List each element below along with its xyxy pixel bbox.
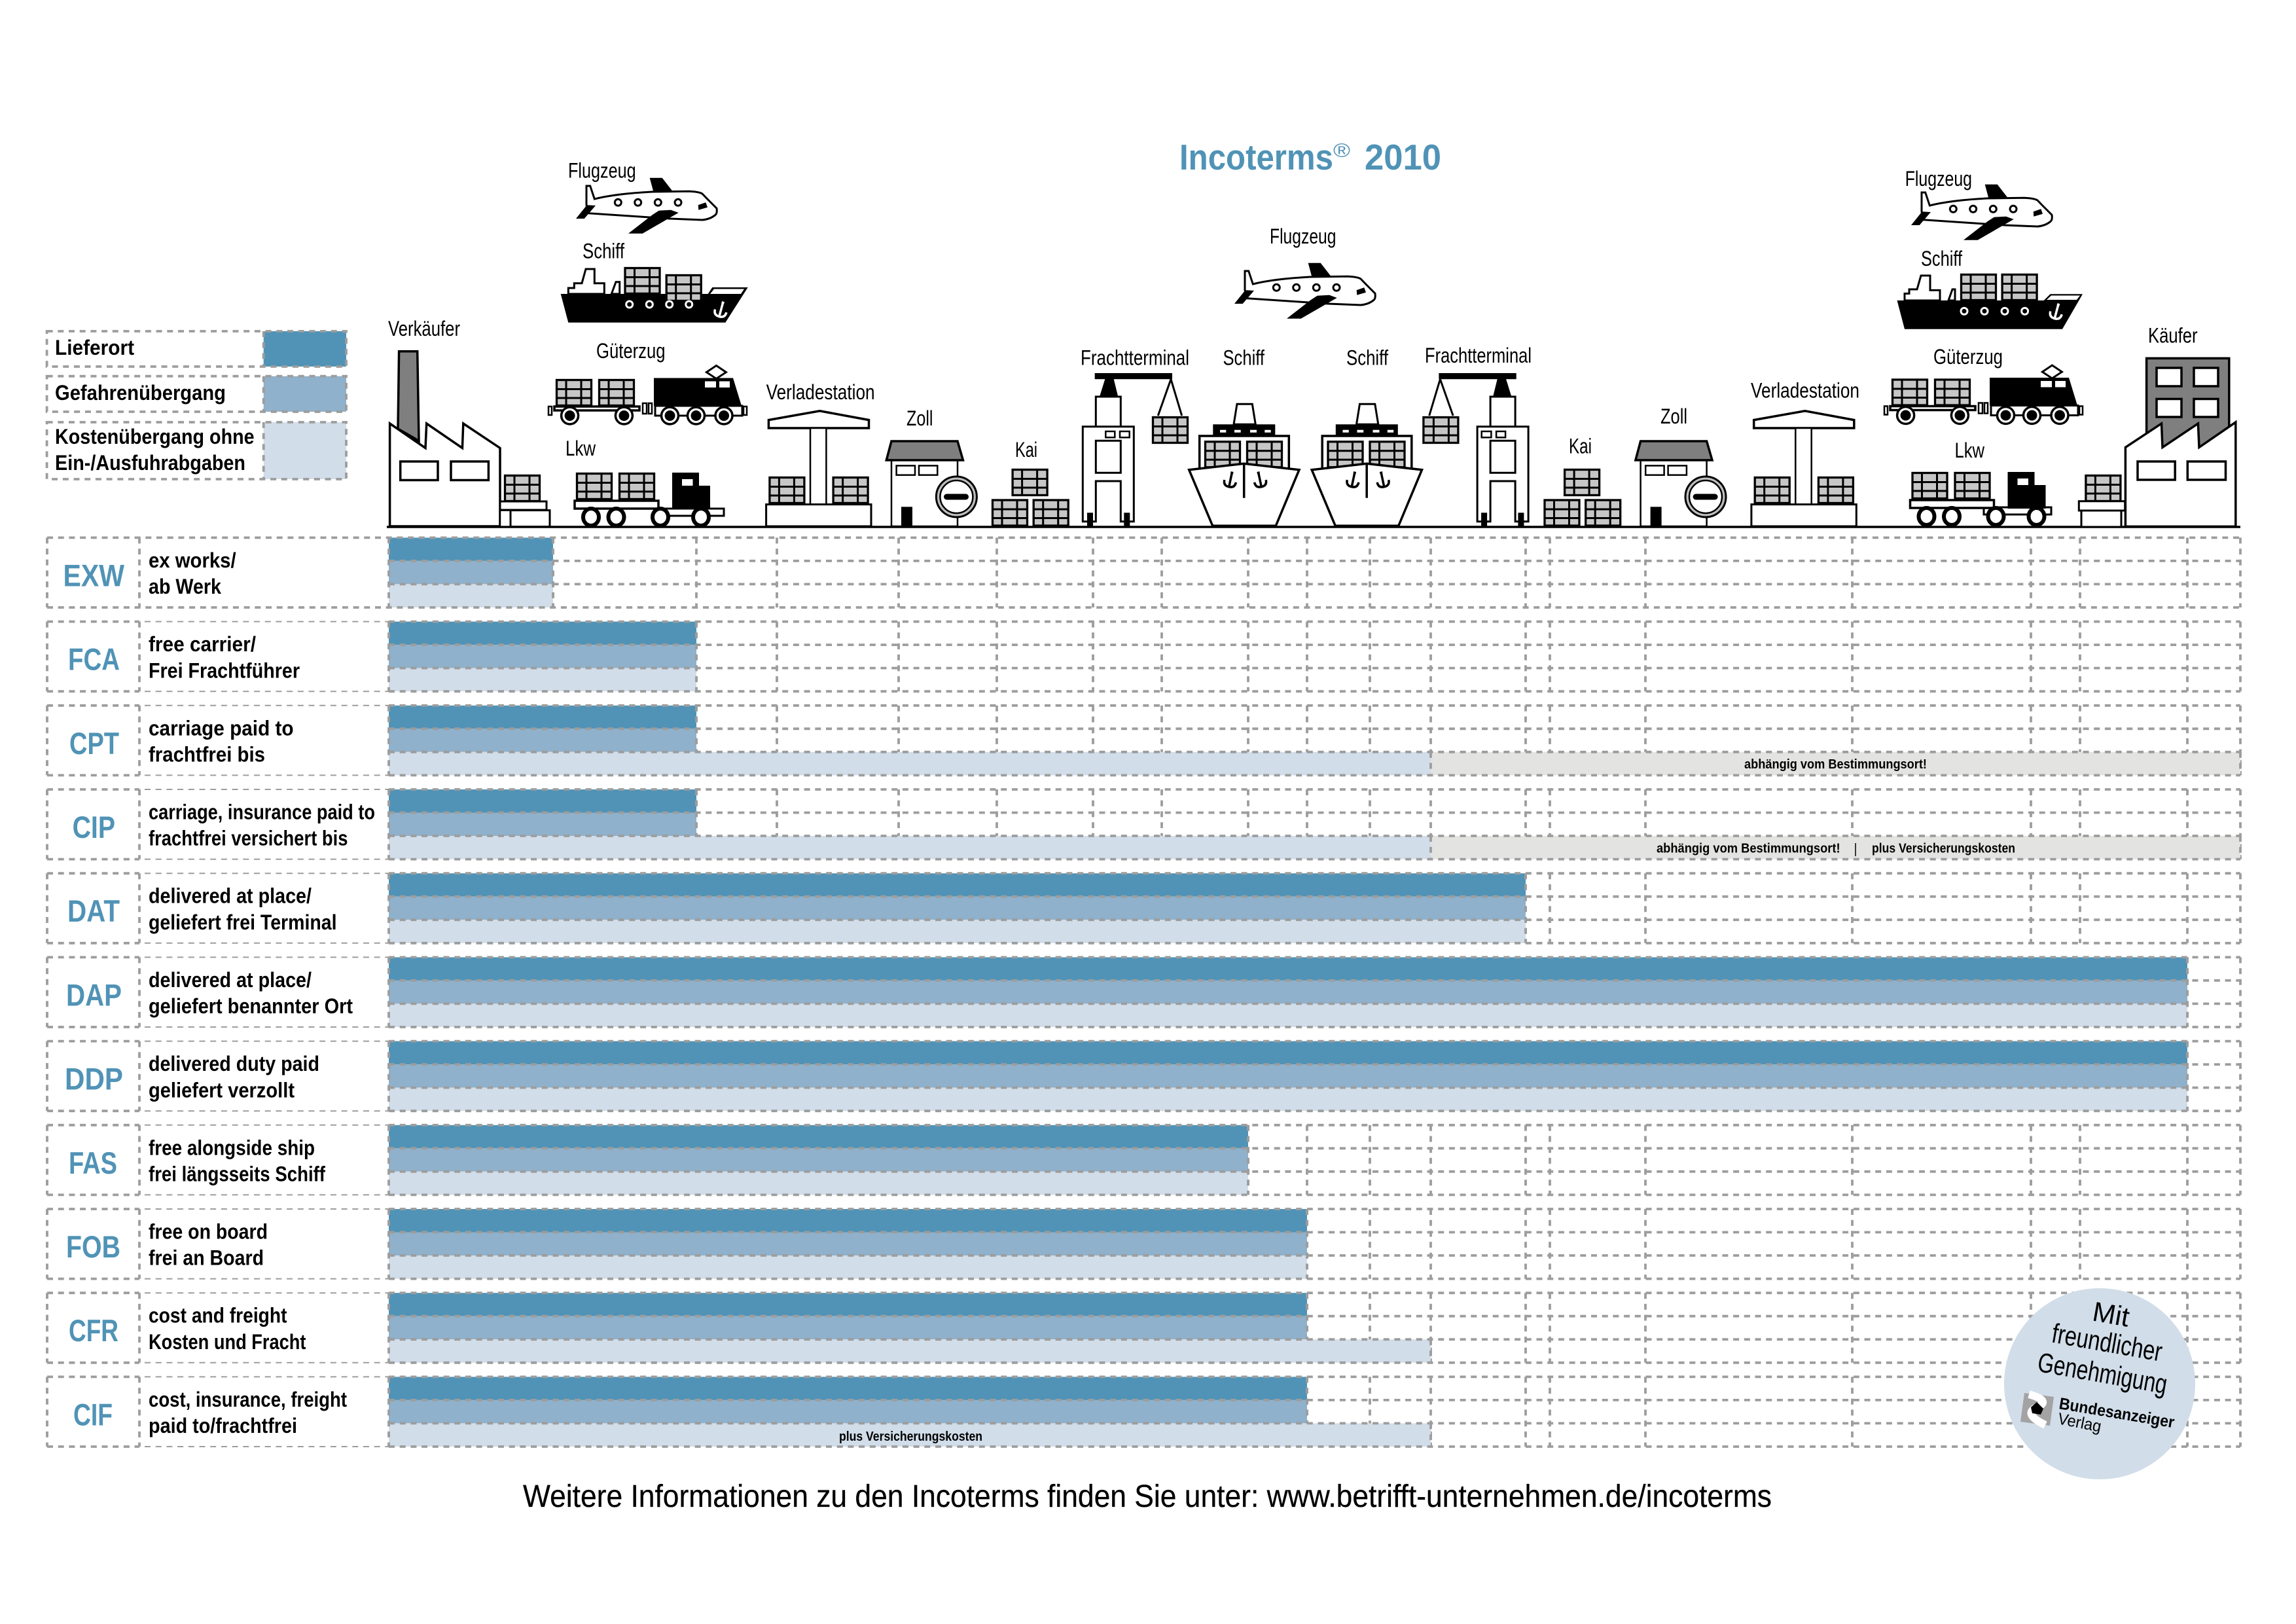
label: Güterzug: Güterzug <box>1933 345 2003 369</box>
label: Schiff: Schiff <box>1346 346 1388 369</box>
note: destination and insurance <box>1657 842 2015 856</box>
icon: loading station <box>1751 411 1856 526</box>
ground line <box>387 526 2240 528</box>
description: FAS: free alongside ship <box>149 1136 315 1159</box>
bars: FAS <box>389 1125 1248 1195</box>
description: DAP <box>149 968 353 1018</box>
description: FAS: frei längsseits Schiff <box>149 1163 325 1186</box>
icon: freight train <box>548 365 747 424</box>
description: CIP: carriage, insurance paid to <box>149 800 375 823</box>
row: CPT <box>47 706 2240 775</box>
description: FOB <box>149 1220 268 1270</box>
label: Frachtterminal: Frachtterminal <box>1081 346 1189 369</box>
legend: Kostenübergang: Ein-/Ausfuhrabgaben <box>55 451 245 475</box>
icon: ship front <box>1189 404 1299 526</box>
label: Käufer: Käufer <box>2148 324 2198 348</box>
code: DDP: DDP <box>65 1062 123 1096</box>
note: destination and insurance: plus Versicherungskosten <box>1872 842 2015 856</box>
description: FCA: Frei Frachtführer <box>149 659 300 682</box>
row: EXW <box>47 537 2240 607</box>
row: FAS <box>47 1125 2240 1195</box>
code: DAT: DAT <box>67 893 120 928</box>
legend: Lieferort: Lieferort <box>55 336 134 359</box>
bars: CIP <box>389 789 2240 859</box>
description: CFR <box>149 1304 306 1354</box>
legend: Kostenübergang <box>55 425 255 475</box>
label: Verladestation: Verladestation <box>766 380 875 404</box>
label: Schiff: Schiff <box>583 240 624 263</box>
title: Incoterms <box>1179 137 1333 177</box>
icon: freight terminal crane <box>1083 373 1187 527</box>
description: CIF <box>149 1388 347 1437</box>
label: Lkw: Lkw <box>1954 439 1985 462</box>
row: CIF <box>47 1377 2240 1447</box>
description: CIF: paid to/frachtfrei <box>149 1414 297 1437</box>
bars: DDP <box>389 1041 2187 1111</box>
code: FAS: FAS <box>69 1146 117 1180</box>
title <box>1179 137 1441 177</box>
title: 2010 <box>1365 137 1441 177</box>
label: Kai: Kai <box>1015 438 1037 461</box>
icon: freight terminal crane <box>1424 373 1528 527</box>
description: DDP: geliefert verzollt <box>149 1078 295 1102</box>
icon: buyer factory <box>2079 358 2236 527</box>
description: DAT: delivered at place/ <box>149 884 312 908</box>
legend <box>47 331 346 479</box>
label: Zoll: Zoll <box>1660 405 1687 428</box>
icon: quay crates <box>992 470 1068 526</box>
icon: seller factory <box>390 352 550 527</box>
badge: permission <box>2004 1288 2195 1479</box>
row: DAT <box>47 873 2240 943</box>
description: FOB: free on board <box>149 1220 268 1244</box>
icon: freight train <box>1884 365 2083 424</box>
label: Kai: Kai <box>1569 435 1592 458</box>
label: Flugzeug: Flugzeug <box>1905 167 1972 190</box>
row: DDP <box>47 1041 2240 1111</box>
code: CIF: CIF <box>73 1397 113 1432</box>
code: FCA: FCA <box>68 642 120 677</box>
icon: customs house <box>1636 441 1726 526</box>
label: Zoll: Zoll <box>906 406 933 430</box>
code: CFR: CFR <box>69 1313 118 1348</box>
description: FAS <box>149 1136 325 1186</box>
label: Verladestation: Verladestation <box>1751 378 1859 402</box>
icon: ship front <box>1312 404 1422 526</box>
description: DAT <box>149 884 336 934</box>
legend: Gefahrenübergang: Gefahrenübergang <box>55 381 226 405</box>
legend: Kostenübergang: Kostenübergang ohne <box>55 425 255 448</box>
icon: plane <box>1234 263 1375 319</box>
icon: loading station <box>766 411 871 526</box>
bars: CIF <box>389 1377 1431 1447</box>
row: CFR <box>47 1293 2240 1363</box>
description: CPT <box>149 716 294 766</box>
note: destination and insurance: abhängig vom Bestimmungsort! <box>1657 842 1840 856</box>
logo text: Verlag <box>2056 1409 2103 1436</box>
icon: cargo ship <box>561 268 748 323</box>
code: CIP: CIP <box>73 810 115 844</box>
icon: Bundesanzeiger logo <box>2020 1393 2054 1426</box>
icon: cargo ship <box>1897 275 2083 329</box>
description: DDP <box>149 1052 319 1102</box>
description: CPT: frachtfrei bis <box>149 743 265 767</box>
description: CFR: cost and freight <box>149 1304 287 1327</box>
description: CPT: carriage paid to <box>149 716 294 740</box>
label: Schiff: Schiff <box>1921 247 1962 270</box>
bars: EXW <box>389 537 553 607</box>
description: FCA: free carrier/ <box>149 632 256 656</box>
icon: plane <box>1911 185 2052 240</box>
bars: CPT <box>389 706 2240 775</box>
label: Verkäufer: Verkäufer <box>388 317 460 340</box>
description: EXW <box>149 549 236 598</box>
description: CFR: Kosten und Fracht <box>149 1330 306 1354</box>
code: EXW: EXW <box>63 558 125 592</box>
bars: CFR <box>389 1293 1431 1363</box>
description: EXW: ex works/ <box>149 549 236 572</box>
badge: permission: Mit <box>2090 1296 2132 1333</box>
label: Güterzug: Güterzug <box>596 339 665 363</box>
label: Flugzeug: Flugzeug <box>568 158 636 182</box>
icon: plane <box>576 178 717 234</box>
bars: DAP <box>389 957 2187 1027</box>
row: FCA <box>47 622 2240 691</box>
code: CPT: CPT <box>69 726 119 761</box>
label: Lkw: Lkw <box>565 437 596 460</box>
bars: DAT <box>389 873 1526 943</box>
description: DAT: geliefert frei Terminal <box>149 911 336 934</box>
description: FOB: frei an Board <box>149 1246 264 1270</box>
icon: customs house <box>886 441 977 526</box>
label: Frachtterminal: Frachtterminal <box>1425 344 1532 367</box>
note: destination: abhängig vom Bestimmungsort! <box>1744 757 1927 772</box>
logo text: Bundesanzeiger <box>2058 1394 2176 1432</box>
badge: permission: Genehmigung <box>2036 1346 2170 1399</box>
description: CIF: cost, insurance, freight <box>149 1388 347 1411</box>
icon: quay crates <box>1545 470 1621 526</box>
icon: truck <box>575 473 724 526</box>
row: CIP <box>47 789 2240 859</box>
note: insurance: plus Versicherungskosten <box>839 1430 982 1444</box>
badge: permission: freundlicher <box>2050 1318 2164 1367</box>
description: CIP <box>149 800 375 850</box>
bars: FOB <box>389 1209 1307 1279</box>
label: Flugzeug: Flugzeug <box>1270 225 1336 248</box>
code: FOB: FOB <box>66 1229 120 1264</box>
icon: truck <box>1910 472 2051 525</box>
label: Schiff: Schiff <box>1223 346 1265 369</box>
description: FCA <box>149 632 300 682</box>
code: DAP: DAP <box>66 977 122 1012</box>
bars: FCA <box>389 622 696 691</box>
title: ® <box>1333 140 1350 162</box>
description: CIP: frachtfrei versichert bis <box>149 827 348 850</box>
description: DAP: delivered at place/ <box>149 968 312 992</box>
footer text: Weitere Informationen zu den Incoterms finden Sie unter: www.betrifft-unternehmen.de/incoterms <box>523 1479 1772 1514</box>
row: DAP <box>47 957 2240 1027</box>
description: DAP: geliefert benannter Ort <box>149 994 353 1018</box>
description: EXW: ab Werk <box>149 575 221 598</box>
description: DDP: delivered duty paid <box>149 1052 319 1075</box>
row: FOB <box>47 1209 2240 1279</box>
